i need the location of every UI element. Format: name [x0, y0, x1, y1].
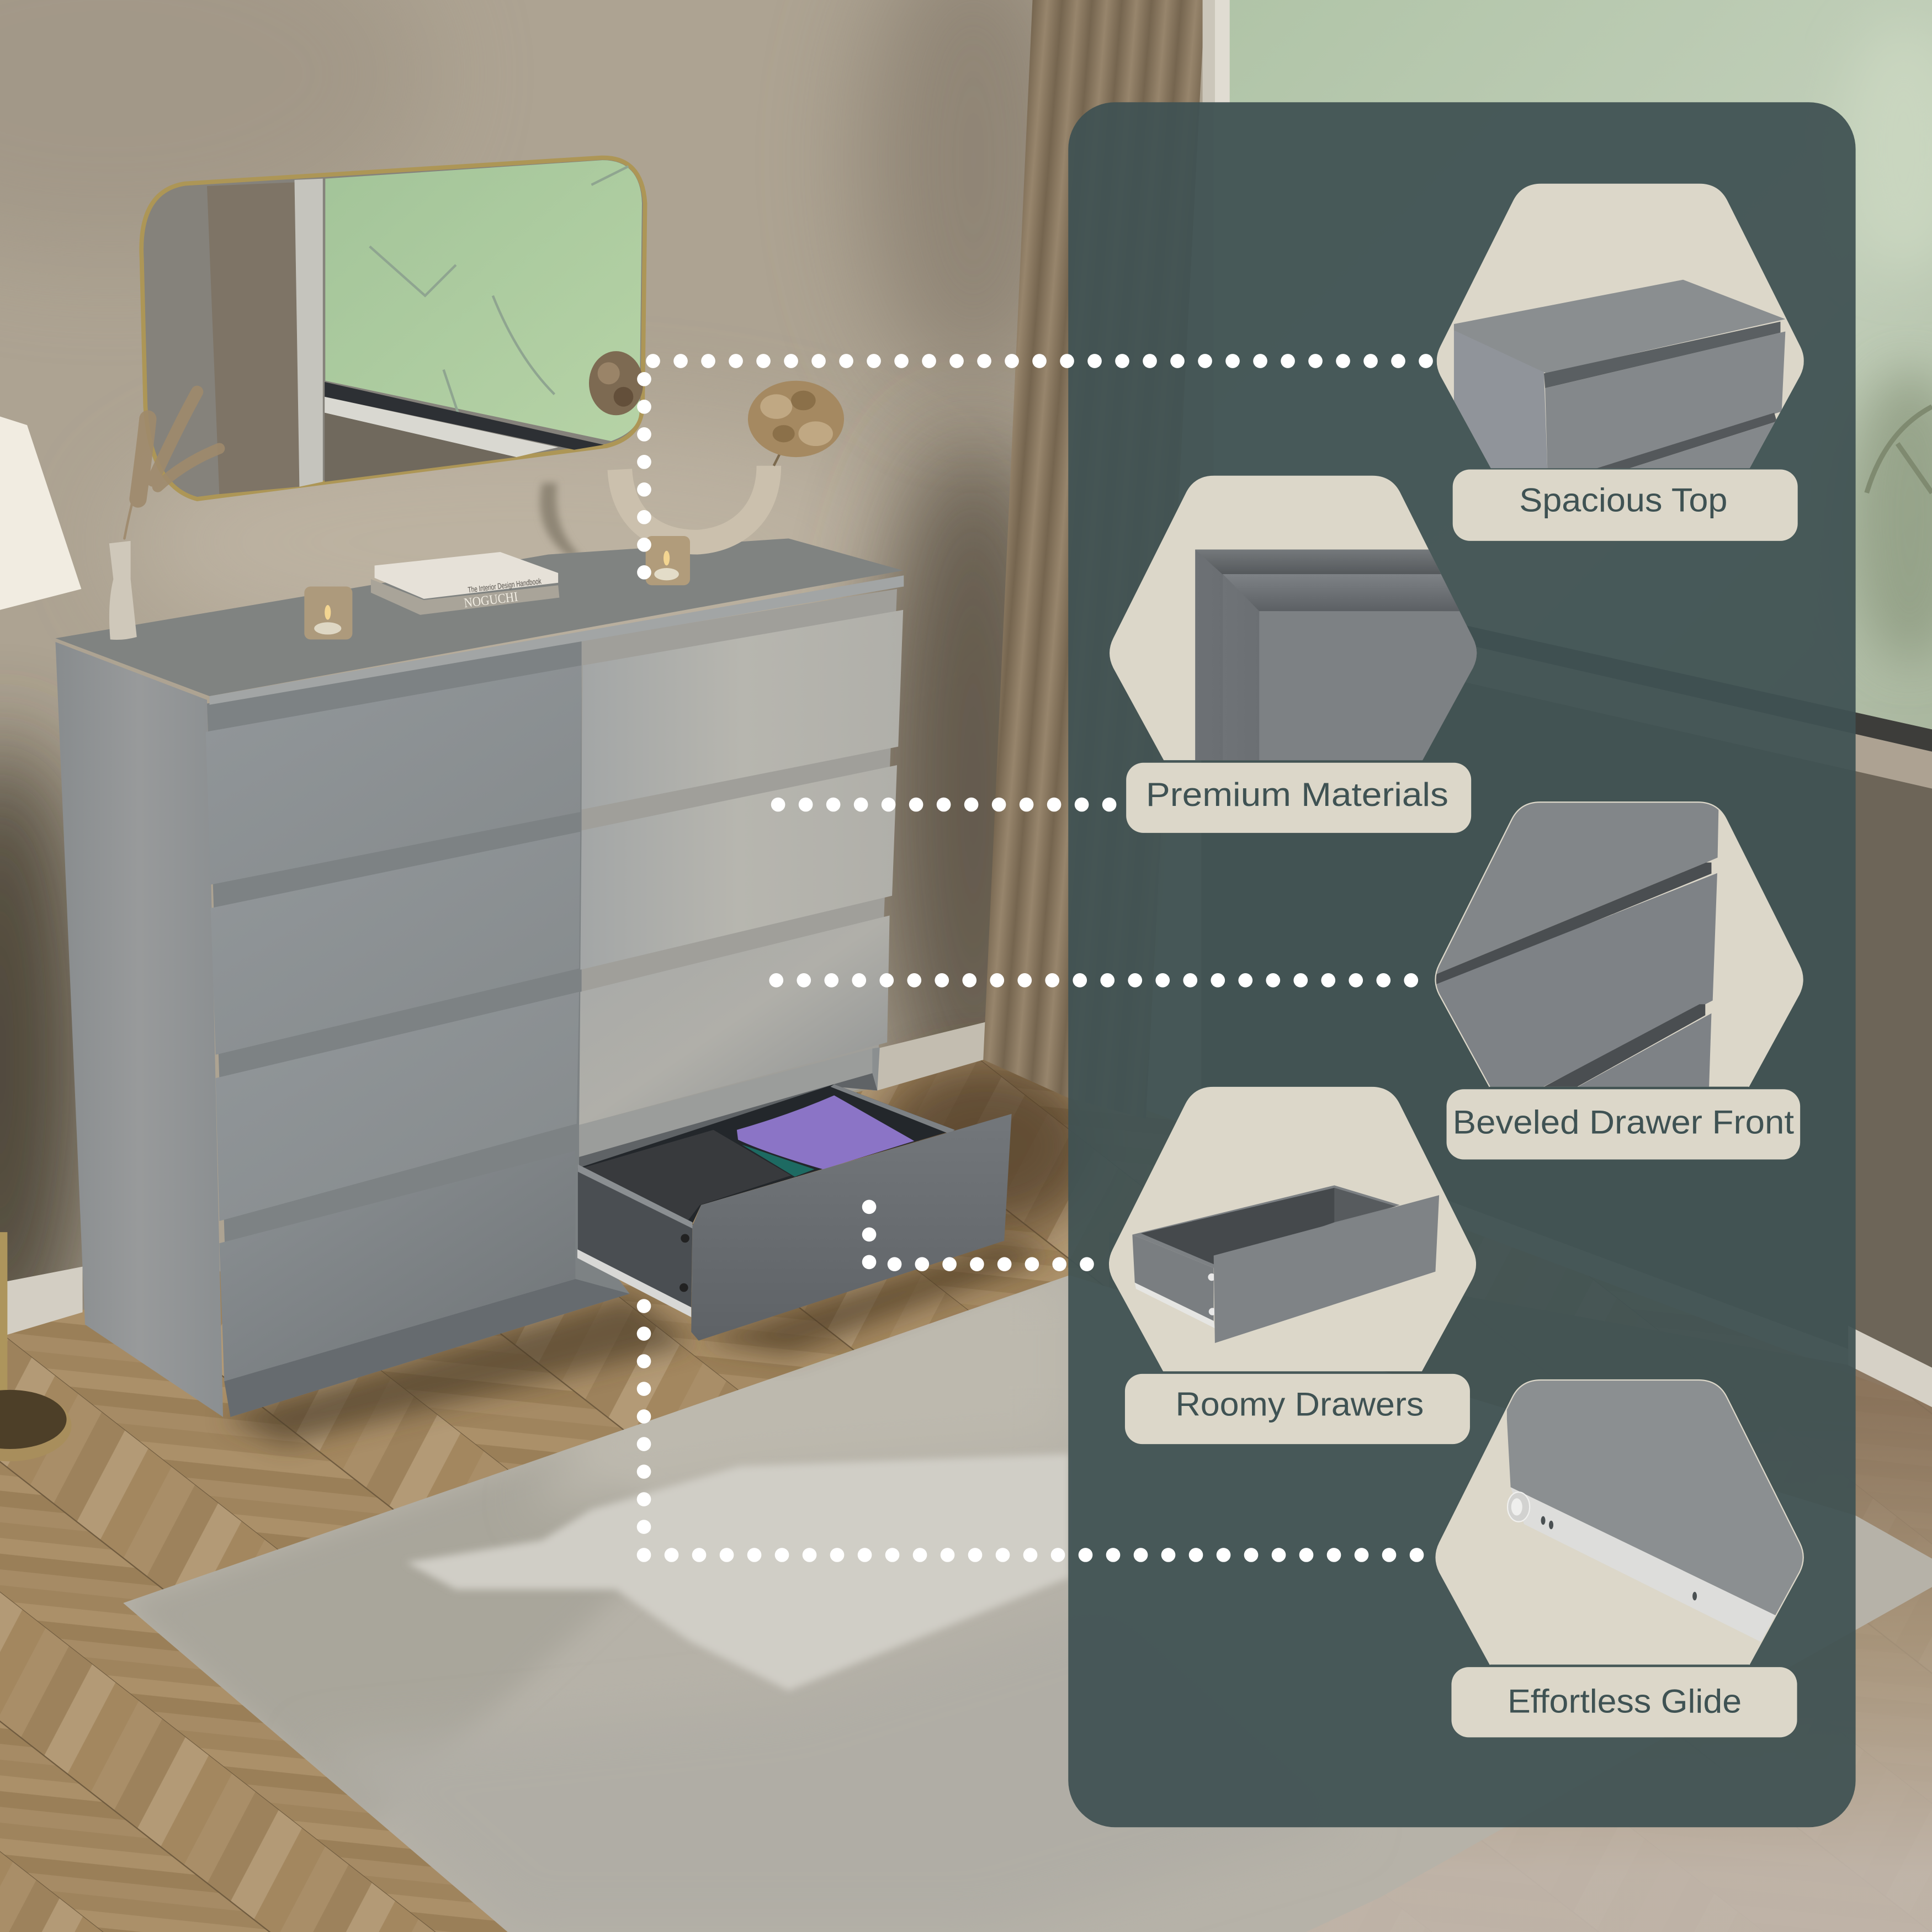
- book spine title: noguchi: NOGUCHI: [463, 590, 519, 611]
- middle baseboard: [877, 1021, 988, 1090]
- window sill: [1214, 579, 1932, 791]
- clothes purple: [737, 1095, 914, 1169]
- dresser side: [55, 642, 223, 1417]
- mirror reflection: window base: [325, 397, 558, 457]
- far inner edge: [830, 1084, 955, 1134]
- hexagon image: drawer slide: [1417, 1355, 1836, 1676]
- left column drawers: [206, 665, 582, 885]
- hexagon image: layered panels: [1090, 468, 1506, 771]
- feature: premium materials: [1090, 468, 1506, 833]
- lamp pole: [0, 1232, 7, 1417]
- mirror reflection: foliage: [325, 160, 642, 441]
- dresser top edge: [209, 575, 904, 705]
- window foliage: [1856, 60, 1932, 670]
- dotted connector: premium materials: [778, 802, 1113, 808]
- candle right: [646, 536, 690, 585]
- dresser top: [55, 538, 903, 696]
- floor shadow near curtain: [875, 1060, 1097, 1232]
- mirror reflection: curtain: [207, 182, 299, 494]
- decor on dresser: [109, 351, 844, 640]
- book spine title: handbook: The Interior Design Handbook: [468, 577, 542, 595]
- hexagon outline: [1435, 802, 1803, 1087]
- hexagon outline: [1436, 1380, 1803, 1665]
- dotted connector: beveled drawer front: [776, 977, 1414, 984]
- open drawer front: [691, 1114, 1012, 1341]
- mirror: [141, 158, 645, 499]
- floor shadow: [223, 1294, 692, 1444]
- feature: effortless glide: [1417, 1355, 1836, 1737]
- faded floor at right: [1109, 1232, 1932, 1932]
- U vase: [620, 466, 769, 542]
- lamp: [0, 416, 81, 1461]
- label: beveled drawer front: [1447, 1089, 1800, 1159]
- rug: [111, 1269, 1932, 1932]
- hexagon image: dresser top: [1436, 183, 1804, 468]
- label: premium materials: [1126, 763, 1471, 833]
- frame post: [872, 1047, 880, 1090]
- dotted connector: effortless glide: [644, 1306, 1417, 1555]
- open drawer floor shadow: [699, 1241, 1047, 1355]
- right column drawers: [582, 610, 903, 810]
- clothes teal: [742, 1145, 814, 1177]
- feature panel: [1068, 102, 1856, 1827]
- dotted connector: roomy drawers: [869, 1207, 1090, 1264]
- lamp shade: [0, 416, 81, 610]
- feature: spacious top: [1417, 172, 1824, 541]
- label: beveled drawer front: Beveled Drawer Front: [1453, 1103, 1794, 1141]
- clothes black: [582, 1130, 791, 1221]
- right front frame: [582, 589, 897, 1164]
- label: roomy drawers: Roomy Drawers: [1175, 1386, 1424, 1423]
- feature: beveled drawer front: [1417, 795, 1824, 1159]
- right wall: [1201, 622, 1932, 1380]
- window view: [1214, 0, 1932, 752]
- candle left: [304, 586, 352, 639]
- left baseboard: [0, 1267, 83, 1337]
- open drawer interior: [578, 1084, 955, 1224]
- label: spacious top: Spacious Top: [1519, 481, 1727, 518]
- hexagon image: drawer bevel: [1417, 795, 1824, 1097]
- mirror reflection: branches: [370, 166, 628, 425]
- label: effortless glide: [1451, 1667, 1797, 1737]
- label: roomy drawers: [1125, 1374, 1470, 1444]
- open drawer side: [578, 1168, 692, 1310]
- books: [371, 552, 559, 615]
- pampas grass: [124, 392, 219, 538]
- drawer screws: [681, 1234, 689, 1243]
- mirror reflection: window frame: [294, 179, 323, 487]
- label: effortless glide: Effortless Glide: [1508, 1682, 1742, 1720]
- lamp base top: [0, 1390, 67, 1449]
- label: premium materials: Premium Materials: [1146, 776, 1448, 813]
- left vase: [109, 541, 137, 640]
- dried flower left of U vase: [589, 351, 643, 415]
- right baseboard: [1848, 1326, 1932, 1407]
- dotted connector: spacious top: [644, 361, 1429, 575]
- wall shadow of U vase: [540, 483, 582, 557]
- drawer cavity: [579, 1073, 877, 1171]
- window frame: [1203, 0, 1215, 104]
- feature: roomy drawers: [1090, 1078, 1497, 1444]
- mirror reflection: dark frame: [325, 382, 604, 450]
- hexagon image: open drawer: [1090, 1078, 1497, 1380]
- slide rail: [577, 1249, 691, 1317]
- dresser: [55, 538, 1047, 1444]
- left front frame: [207, 641, 630, 1417]
- label: spacious top: [1453, 469, 1798, 541]
- lamp base: [0, 1390, 71, 1461]
- recess above open drawer: [579, 1049, 872, 1157]
- plinth: [224, 1279, 630, 1417]
- curtain: [983, 0, 1205, 1119]
- dried flower right: [748, 381, 844, 466]
- floor: [0, 1053, 1932, 1932]
